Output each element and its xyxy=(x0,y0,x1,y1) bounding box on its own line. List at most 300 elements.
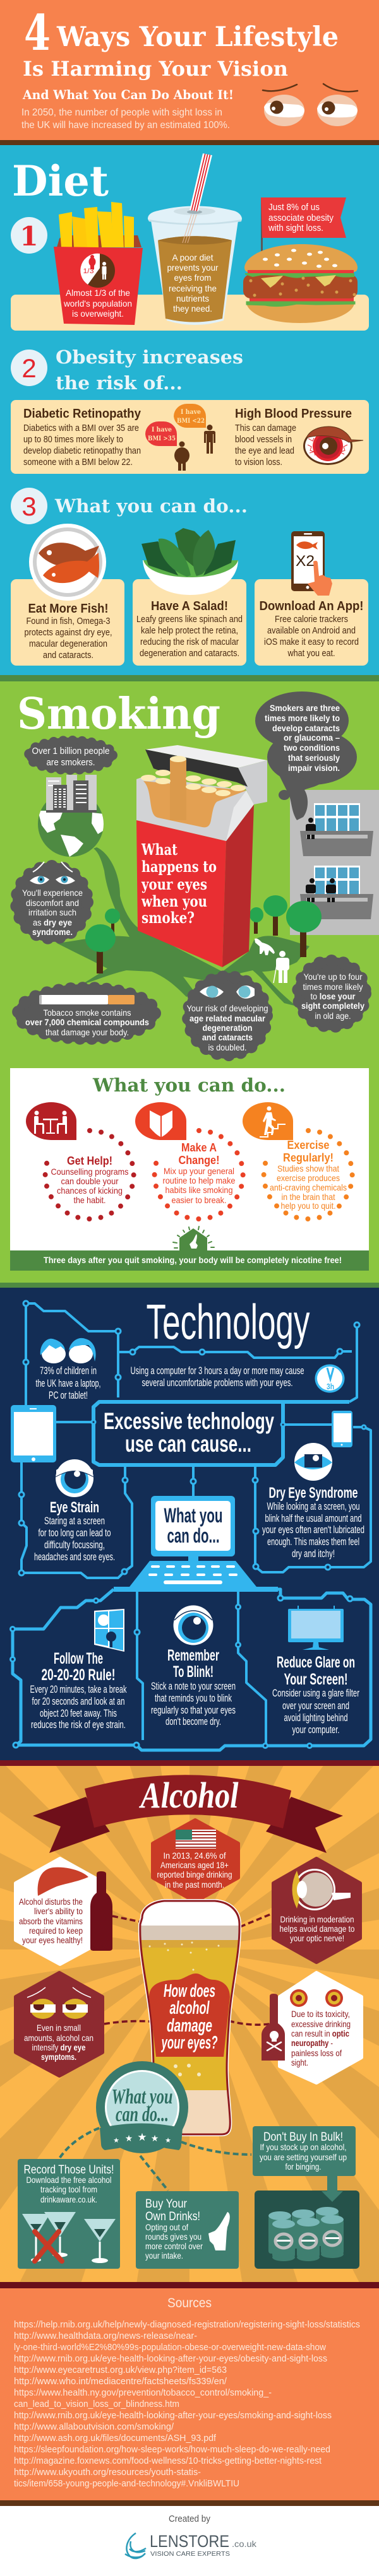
tip: get help: the habit. xyxy=(73,1195,106,1205)
text: source links: http://www.healthdata.org/news-release/near- xyxy=(14,2331,197,2341)
text: source links: https://sleepfoundation.org/how-sleep-works/how-much-sleep-do-we-really-need xyxy=(14,2444,330,2455)
flag callout: 8%: Just 8% of us xyxy=(268,203,320,213)
text: reduce glare: your computer. xyxy=(292,1724,340,1736)
text: children stat: 73% of children in xyxy=(40,1365,97,1377)
icon: smartphone xyxy=(332,1411,352,1447)
hexagon: binge drinking stat: in the past month. xyxy=(165,1879,224,1890)
box: don't buy in bulk: Don't Buy In Bulk! xyxy=(263,2131,343,2144)
hexagon: optic neuropathy: excessive drinking xyxy=(291,2019,351,2029)
text: children stat: PC or tablet! xyxy=(49,1389,88,1401)
hexagon: optic neuropathy: Due to its toxicity, xyxy=(291,2009,350,2019)
heading on pack: What xyxy=(141,840,177,859)
text: source links: http://www.who.int/mediacentre/factsheets/fs339/en/ xyxy=(14,2376,227,2387)
icon: beer glass: How does xyxy=(164,1981,215,2001)
hexagon: optic nerve: your optic nerve! xyxy=(290,1933,344,1943)
tip: exercise regularly: help you to quit. xyxy=(280,1201,336,1211)
cloud: three times more likely: or glaucoma – xyxy=(284,732,340,743)
text: remember to blink: that reminds you to blink xyxy=(155,1692,232,1704)
hexagon: optic nerve: Drinking in moderation xyxy=(280,1914,354,1924)
heading on pack xyxy=(141,840,217,927)
box: buy your own drinks xyxy=(136,2191,239,2269)
hexagon: liver: absorb the vitamins xyxy=(19,1917,83,1926)
flag callout: 8%: associate obesity xyxy=(268,213,334,223)
tip: get help: can double your xyxy=(61,1176,119,1186)
logo: Lenstore xyxy=(125,2532,257,2558)
cloud: macular degeneration: age related macular xyxy=(190,1013,265,1023)
cloud: three times more likely: Smokers are three xyxy=(270,703,340,713)
text: salad: degeneration and cataracts. xyxy=(140,649,239,659)
text: source links: http://www.rnib.org.uk/eye-health-looking-after-your-eyes/smoking-and-sight-loss xyxy=(14,2410,332,2421)
text: remember to blink: Stick a note to your screen xyxy=(151,1680,236,1692)
callout: nicotine free: Three days after you quit smoking, your body will be completely nicotine free! xyxy=(44,1255,342,1265)
cloud: dry eye syndrome: irritation such xyxy=(28,907,76,917)
icon: globe with city xyxy=(38,775,105,857)
cloud: three times more likely: that seriously xyxy=(288,753,340,763)
tip: exercise regularly: Exercise xyxy=(287,1139,330,1151)
text: source links: http://magazine.foxnews.com/food-wellness/10-tricks-getting-better-nights-rest xyxy=(14,2455,322,2466)
cloud: tobacco chemicals: that damage your body. xyxy=(45,1027,129,1037)
box: record those units: Record Those Units! xyxy=(24,2163,114,2177)
cloud: tobacco chemicals: Tobacco smoke contains xyxy=(43,1008,131,1018)
tip: make a change: routine to help make xyxy=(163,1175,236,1185)
text: high blood pressure: the eye and lead xyxy=(235,446,294,456)
text: eye strain: for too long can lead to xyxy=(38,1527,111,1539)
building with balconies xyxy=(290,790,379,935)
cloud: dry eye syndrome xyxy=(13,862,91,942)
icon: beer cans xyxy=(268,2207,344,2261)
icon: beer glass xyxy=(139,1901,240,2134)
box: don't buy in bulk: you are setting yourself up xyxy=(260,2152,347,2162)
badge: what you can do (alcohol): ★ xyxy=(113,2137,119,2144)
text: salad: Leafy greens like spinach and xyxy=(136,615,243,625)
hexagon: dry eye symptoms: Even in small xyxy=(37,2023,81,2033)
box: buy your own drinks: your intake. xyxy=(145,2250,183,2261)
tip: exercise regularly: Regularly! xyxy=(283,1151,334,1164)
badge: what you can do (alcohol): ★ xyxy=(125,2133,133,2143)
text: fish: protects against dry eye, xyxy=(24,628,112,638)
box: don't buy in bulk xyxy=(253,2126,359,2269)
icon: blinking eye xyxy=(173,1605,214,1645)
cloud: three times more likely xyxy=(255,691,357,820)
icon: beer glass: alcohol xyxy=(169,1998,210,2018)
badge: what you can do (alcohol): can do... xyxy=(116,2103,169,2126)
cloud: lose your sight: sight completely xyxy=(301,1001,364,1011)
heading: excessive technology xyxy=(104,1408,274,1457)
text: high blood pressure: to vision loss. xyxy=(235,457,282,468)
icon: clouded eyes xyxy=(200,985,255,999)
badge: what you can do (alcohol): ★ xyxy=(151,2133,159,2143)
text: diabetic retinopathy: Diabetic Retinopathy xyxy=(23,407,141,421)
cloud: lose your sight: in old age. xyxy=(315,1011,351,1021)
cloud: dry eye syndrome: discomfort and xyxy=(26,898,79,908)
badge: what you can do (alcohol): ★ xyxy=(165,2137,171,2144)
icon: thumbs up xyxy=(208,2212,230,2250)
panel: download an app xyxy=(255,531,368,666)
intro text xyxy=(21,107,230,131)
text: source links: http://www.ash.org.uk/files/documents/ASH_93.pdf xyxy=(14,2433,217,2444)
icon: computer with what you can do xyxy=(114,1496,278,1592)
hexagon: optic neuropathy: neuropathy - xyxy=(291,2038,333,2048)
title: Ways Your Lifestyle xyxy=(56,21,339,53)
number badge 3: 3 xyxy=(21,491,37,521)
dashed connectors (alcohol) xyxy=(104,1914,272,2025)
box: buy your own drinks: Buy Your xyxy=(145,2197,188,2211)
icons: dog and blind person xyxy=(255,938,289,983)
cloud: tobacco chemicals xyxy=(15,984,159,1042)
heading on pack: smoke? xyxy=(141,909,195,927)
title: And What You Can Do About It! xyxy=(22,87,234,102)
text: salad: reducing the risk of macular xyxy=(140,637,239,647)
icon: fries with overweight stat xyxy=(54,202,143,325)
banner: Alcohol: Alcohol xyxy=(139,1775,239,1816)
trees xyxy=(85,895,322,973)
text: source links: http://www.rnib.org.uk/eye-health-looking-after-your-eyes/obesity-and-sight-loss xyxy=(14,2353,327,2364)
text: 20-20-20 rule: Every 20 minutes, take a break xyxy=(30,1683,127,1695)
icon: thumbs up xyxy=(173,1226,214,1250)
icon: dry eye xyxy=(294,1443,332,1481)
text: created by: Created by xyxy=(169,2514,210,2524)
hexagon: liver: required to keep xyxy=(29,1926,83,1936)
icon: logo swirl xyxy=(125,2533,146,2558)
text: children stat xyxy=(35,1365,101,1401)
icon: soft drink cup: they need. xyxy=(173,303,212,314)
cloud: dry eye syndrome: as dry eye xyxy=(33,917,72,927)
sunburst rays xyxy=(0,1766,379,2282)
number badge 2 xyxy=(11,350,47,386)
box: don't buy in bulk: If you stock up on alcohol, xyxy=(260,2142,346,2152)
cloud: one billion smokers: are smokers. xyxy=(47,757,95,768)
circuit lines xyxy=(10,1301,371,1750)
tip: get help: Get Help! xyxy=(67,1155,112,1167)
icon: US flag xyxy=(176,1830,216,1849)
text: remember to blink: don't become dry. xyxy=(165,1715,221,1727)
cloud: one billion smokers xyxy=(26,738,116,773)
logo: Lenstore: LENSTORE xyxy=(150,2532,229,2551)
text: high blood pressure xyxy=(235,407,352,468)
cloud: macular degeneration xyxy=(184,973,270,1059)
text: fish xyxy=(24,602,112,661)
heading on pack: when you xyxy=(141,892,207,910)
text: diabetic retinopathy: Diabetics with a BMI over 35 are xyxy=(23,423,139,433)
heading: obesity increases the risk: Obesity increases xyxy=(56,346,243,368)
heading: What you can do... xyxy=(92,1074,286,1096)
hexagon: optic neuropathy: can result in optic xyxy=(291,2028,349,2038)
heading: Diet: Diet xyxy=(12,156,109,206)
hexagon: liver: Alcohol disturbs the xyxy=(19,1897,83,1907)
text: source links: can_lead_to_vision_loss_or_blindness.htm xyxy=(14,2399,179,2409)
icon: strained eye xyxy=(56,1459,93,1497)
tip: make a change: Change! xyxy=(178,1154,220,1167)
cloud: lose your sight xyxy=(294,957,369,1030)
icon: soft drink cup: eyes from xyxy=(174,273,211,283)
hexagon: binge drinking stat: Americans aged 18+ xyxy=(160,1860,229,1870)
text: source links: http://www.eyecaretrust.org.uk/view.php?item_id=563 xyxy=(14,2365,227,2375)
icon: cigarette xyxy=(39,995,135,1004)
number badge 2: 2 xyxy=(21,353,37,383)
box: record those units: tracking tool from xyxy=(40,2184,97,2194)
hexagon: dry eye symptoms: intensify dry eye xyxy=(32,2042,86,2052)
cloud: three times more likely: times more likely to xyxy=(265,713,340,723)
speech bubbles and BMI figures: I have xyxy=(181,408,201,416)
cloud: dry eye syndrome: You'll experience xyxy=(22,888,83,898)
heading: what you can do (diet): What you can do... xyxy=(54,495,248,517)
cloud: dry eye syndrome: syndrome. xyxy=(32,927,73,937)
box: record those units: drinkaware.co.uk. xyxy=(40,2194,97,2204)
cloud: macular degeneration: Your risk of developing xyxy=(187,1003,268,1013)
icon: burger xyxy=(243,244,358,323)
heading: Smoking: Smoking xyxy=(17,689,220,739)
dashed connectors (teal) xyxy=(59,2128,251,2191)
badge: what you can do (alcohol): What you xyxy=(111,2085,173,2108)
text: source links: ly-one-third-world%E2%80%99s-population-obese-or-overweight-new-data-show xyxy=(14,2342,326,2353)
text: app: available on Android and xyxy=(267,626,356,636)
text: eye strain: Eye Strain xyxy=(50,1499,99,1516)
panel: eat more fish xyxy=(11,524,124,666)
heading: obesity increases the risk: the risk of... xyxy=(56,372,183,394)
text: app: iOS make it easy to record xyxy=(264,637,359,647)
icon: liver xyxy=(38,1867,88,1896)
cloud: three times more likely: impair vision. xyxy=(288,763,340,773)
badge: what you can do (alcohol) xyxy=(96,2061,188,2153)
intro text: the UK will have increased by an estimated 100%. xyxy=(21,120,230,131)
cloud: three times more likely: develop cataracts xyxy=(272,723,340,733)
heading on pack: your eyes xyxy=(141,875,207,893)
speech bubbles and BMI figures: I have xyxy=(152,426,172,433)
number badge 3 xyxy=(11,488,47,524)
text: fish: Found in fish, Omega-3 xyxy=(27,616,110,626)
icon: children heads xyxy=(40,1338,96,1363)
text: diabetic retinopathy: up to 80 times more likely to xyxy=(23,435,123,445)
box: don't buy in bulk: for binging. xyxy=(286,2161,321,2172)
number badge 1: 1 xyxy=(20,221,39,252)
text: app: Download An App! xyxy=(259,599,364,613)
speech bubbles and BMI figures xyxy=(145,404,215,471)
title: 4 xyxy=(24,4,51,62)
cloud: lose your sight: times more likely xyxy=(303,982,363,992)
icon: clock 3h xyxy=(315,1364,345,1393)
heading: Sources: Sources xyxy=(167,2296,212,2310)
tip: exercise regularly: in the brain that xyxy=(282,1192,335,1202)
speech bubbles and BMI figures: BMI <22 xyxy=(177,417,205,425)
tip: make a change: Make A xyxy=(181,1141,217,1154)
hexagon: binge drinking stat: reported binge drinking xyxy=(157,1869,232,1879)
intro text: In 2050, the number of people with sight loss in xyxy=(21,107,222,118)
text: eye strain: headaches and sore eyes. xyxy=(34,1551,115,1563)
hexagon: dry eye symptoms: amounts, alcohol can xyxy=(24,2033,93,2043)
icon: martini glasses xyxy=(22,2212,116,2263)
tip: make a change xyxy=(135,1102,243,1219)
text: eye strain: difficulty focussing, xyxy=(44,1539,105,1551)
text: source links: https://www.health.ny.gov/prevention/tobacco_control/smoking_- xyxy=(14,2387,272,2398)
title: Is Harming Your Vision xyxy=(23,57,288,81)
icon: fish plate xyxy=(29,524,106,601)
icon: bloodshot eye xyxy=(303,426,363,465)
tip: get help: Counselling programs xyxy=(51,1167,129,1177)
heading: obesity increases the risk xyxy=(56,346,243,394)
text: high blood pressure: High Blood Pressure xyxy=(235,407,352,421)
tip: make a change: Mix up your general xyxy=(164,1166,234,1176)
hexagon: liver xyxy=(16,1859,112,1964)
text: salad xyxy=(136,599,243,659)
text: remember to blink xyxy=(151,1647,236,1727)
cloud: tobacco chemicals: over 7,000 chemical compounds xyxy=(25,1017,149,1027)
cigarettes xyxy=(143,781,246,827)
heading: excessive technology: Excessive technology xyxy=(104,1408,274,1434)
icon: bloodshot eyes xyxy=(290,1989,343,2007)
text: remember to blink: To Blink! xyxy=(173,1663,214,1681)
text: 20-20-20 rule: reduces the risk of eye strain. xyxy=(31,1719,126,1731)
text: 20-20-20 rule: 20-20-20 Rule! xyxy=(42,1666,115,1684)
tip: get help: chances of kicking xyxy=(57,1185,123,1196)
number badge 1 xyxy=(11,217,47,254)
icon: irritated eyes xyxy=(30,862,75,885)
hexagon: dry eye symptoms: symptoms. xyxy=(41,2052,76,2062)
cloud: lose your sight: to lose your xyxy=(311,991,356,1001)
text: 20-20-20 rule: Follow The xyxy=(54,1650,103,1667)
text: computer hours xyxy=(130,1365,304,1389)
panel: risks xyxy=(11,400,369,474)
text: dry eye syndrome: dry and itchy! xyxy=(292,1548,335,1560)
icon: monitor with glare filter xyxy=(288,1606,344,1650)
heading on pack: happens to xyxy=(141,857,217,876)
text: high blood pressure: blood vessels in xyxy=(235,435,292,445)
icon: fries with overweight stat: 1/3 xyxy=(83,268,93,275)
panel: what you can do (smoking) xyxy=(10,1068,369,1271)
box: buy your own drinks: Own Drinks! xyxy=(145,2210,200,2223)
banner: Alcohol xyxy=(33,1775,343,1853)
hexagon: liver: your eyes healthy! xyxy=(22,1936,83,1945)
icon: fries with overweight stat: Almost 1/3 of the xyxy=(66,288,130,298)
text: eye strain xyxy=(34,1499,115,1563)
hexagon: optic nerve xyxy=(274,1859,360,1962)
box: record those units: Download the free alcohol xyxy=(27,2175,111,2185)
hexagon: optic nerve: helps avoid damage to xyxy=(279,1924,355,1934)
icon: beer glass: damage xyxy=(167,2016,212,2036)
icon: computer with what you can do: What you xyxy=(164,1504,222,1527)
logo: Lenstore: .co.uk xyxy=(232,2539,257,2549)
tip: exercise regularly: exercise produces xyxy=(277,1173,340,1183)
icon: phone with hand: X2 xyxy=(296,553,315,570)
text: computer hours: several uncomfortable problems with your eyes. xyxy=(141,1377,293,1389)
text: high blood pressure: This can damage xyxy=(235,423,296,433)
text: children stat: the UK have a laptop, xyxy=(35,1377,101,1389)
icon: salad bowl xyxy=(141,528,238,595)
text: fish: and cataracts. xyxy=(43,650,93,661)
logo: Lenstore: VISION CARE EXPERTS xyxy=(150,2551,230,2558)
box: record those units xyxy=(18,2159,120,2269)
icon: fries with overweight stat: is overweight. xyxy=(72,309,124,319)
box: buy your own drinks: Opting out of xyxy=(145,2222,188,2232)
title xyxy=(22,4,339,102)
text: 20-20-20 rule: for 20 seconds and look at an xyxy=(32,1695,125,1707)
icon: clock 3h: 3h xyxy=(327,1382,334,1391)
tip: exercise regularly: Studies show that xyxy=(277,1163,339,1173)
text: salad: kale help protect the retina, xyxy=(141,626,238,636)
icon: soft drink cup: A poor diet xyxy=(172,252,214,262)
tip: get help xyxy=(26,1102,134,1219)
tip: make a change: habits like smoking xyxy=(165,1185,232,1195)
cloud: macular degeneration: is doubled. xyxy=(208,1042,246,1052)
text: source links: tics/item/658-young-people-and-technology#.VnkliBWLTIU xyxy=(14,2478,239,2489)
text: app: Free calorie trackers xyxy=(275,615,348,625)
icon: poison bottle xyxy=(262,1994,285,2061)
icon: fries with overweight stat: world's population xyxy=(63,298,132,309)
ground branches xyxy=(57,847,310,1006)
icon: soft drink cup: nutrients xyxy=(176,293,209,303)
flag callout: 8% xyxy=(261,197,346,251)
icon: tablet xyxy=(11,1405,56,1462)
tip: make a change: easier to break. xyxy=(172,1195,226,1205)
box: buy your own drinks: rounds gives you xyxy=(145,2232,202,2242)
text: app xyxy=(259,599,364,659)
hexagon: binge drinking stat: In 2013, 24.6% of xyxy=(163,1850,226,1861)
text: diabetic retinopathy: develop diabetic retinopathy than xyxy=(23,446,141,456)
icon: soft drink cup: prevents your xyxy=(167,262,219,273)
panel: have a salad xyxy=(133,528,246,666)
text: app: what you eat. xyxy=(287,649,335,659)
cloud: one billion smokers: Over 1 billion people xyxy=(32,746,110,756)
badge: what you can do (alcohol): ★ xyxy=(137,2131,147,2143)
cloud: macular degeneration: and cataracts xyxy=(202,1032,253,1042)
flag callout: 8%: with sight loss. xyxy=(268,223,323,233)
heading: excessive technology: use can cause... xyxy=(125,1431,251,1457)
text: eye strain: Staring at a screen xyxy=(44,1515,105,1527)
text: reduce glare: Your Screen! xyxy=(284,1671,347,1688)
icon: window with sun and tree xyxy=(94,1609,124,1652)
text: source links: http://www.allaboutvision.com/smoking/ xyxy=(14,2421,174,2432)
icon: tired eyes xyxy=(263,84,358,126)
text: 20-20-20 rule: object 20 feet away. This xyxy=(40,1707,117,1719)
box: buy your own drinks: more control over xyxy=(145,2241,203,2251)
text: fish: Eat More Fish! xyxy=(28,602,109,616)
text: diabetic retinopathy xyxy=(23,407,141,468)
tip: exercise regularly xyxy=(243,1102,352,1219)
text: source links: https://help.rnib.org.uk/help/newly-diagnosed-registration/registering-sight-loss/statistics xyxy=(14,2319,360,2330)
cloud: lose your sight: You're up to four xyxy=(303,972,363,982)
text: fish: macular degeneration xyxy=(29,639,107,649)
icon: bleary eyes xyxy=(27,1987,91,2019)
icon: wine bottle xyxy=(90,1871,112,1951)
cream table panel xyxy=(11,295,369,331)
icon: computer with what you can do: can do... xyxy=(167,1524,220,1547)
hexagon: dry eye symptoms xyxy=(16,1973,102,2076)
icon: soft drink cup xyxy=(148,153,242,325)
pack body xyxy=(136,820,226,967)
icon: beer glass: your eyes? xyxy=(160,2033,218,2053)
hexagon: optic neuropathy xyxy=(262,1973,361,2083)
cloud: three times more likely: two conditions xyxy=(284,743,340,753)
text: source links: http://www.ukyouth.org/resources/youth-statis- xyxy=(14,2467,201,2478)
hexagon: optic neuropathy: sight. xyxy=(291,2057,308,2067)
tip: exercise regularly: anti-craving chemicals xyxy=(270,1182,347,1192)
text: reduce glare: avoid lighting behind xyxy=(284,1712,347,1724)
icon: soft drink cup: receiving the xyxy=(169,283,217,293)
pack lid xyxy=(145,745,267,768)
text: 20-20-20 rule xyxy=(30,1650,127,1731)
text: dry eye syndrome xyxy=(262,1485,364,1560)
hexagon: optic neuropathy: painless loss of xyxy=(291,2048,342,2058)
text: reduce glare xyxy=(272,1654,359,1736)
text: source links xyxy=(14,2319,360,2489)
icon: phone with hand xyxy=(291,531,332,596)
text: remember to blink: Remember xyxy=(167,1647,219,1664)
icon: cigarette pack xyxy=(136,745,267,967)
icon: eye anatomy xyxy=(292,1869,351,1910)
text: diabetic retinopathy: someone with a BMI below 22. xyxy=(23,457,133,468)
speech bubbles and BMI figures: BMI >35 xyxy=(148,435,176,442)
text: remember to blink: regularly so that your eyes xyxy=(151,1704,236,1716)
text: salad: Have A Salad! xyxy=(151,599,228,613)
